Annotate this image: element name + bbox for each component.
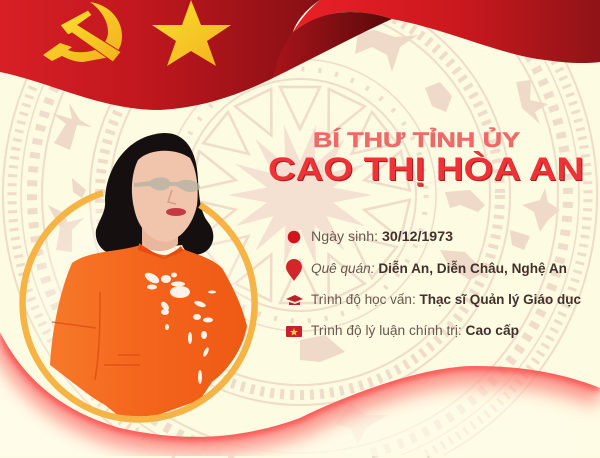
motif: animal upper right	[425, 82, 452, 112]
portrait group	[23, 133, 255, 425]
hammer	[60, 10, 121, 62]
glasses	[134, 177, 200, 192]
portrait ring inner glow	[28, 193, 252, 417]
icon: red dot	[288, 231, 300, 243]
nose	[168, 190, 176, 204]
dress sleeve shadow	[52, 292, 140, 380]
motif: bird right	[522, 188, 560, 232]
heading: name: CAO THỊ HÒA AN	[268, 151, 584, 187]
floral embroidery	[143, 271, 216, 384]
background: drum animal motifs	[48, 30, 560, 445]
heading: role: BÍ THƯ TỈNH ỦY	[313, 128, 520, 152]
top red banner	[0, 0, 600, 110]
portrait gold ring	[23, 193, 255, 419]
icon: flag star	[290, 328, 298, 336]
lips	[166, 208, 186, 216]
text: date of birth: Ngày sinh: 30/12/1973	[311, 229, 454, 244]
drum centre star	[228, 122, 372, 268]
motif: small bird left	[72, 178, 86, 198]
info list	[286, 229, 581, 338]
icon: gold star	[152, 0, 231, 66]
motif: bird bottom	[335, 402, 388, 445]
text: hometown: Quê quán: Diễn An, Diễn Châu, Nghệ An	[311, 261, 567, 276]
hair	[96, 133, 213, 257]
icon: flag background	[286, 326, 302, 337]
motif: deer top	[355, 30, 418, 72]
swoosh soft glow	[0, 338, 600, 441]
motif: deer lower centre	[300, 335, 345, 362]
motif: animal small lower right	[510, 230, 530, 250]
collar	[138, 243, 184, 259]
icon: hammer and sickle	[43, 2, 122, 62]
banner: dark fold	[273, 12, 392, 78]
motif: animal lower right	[440, 250, 485, 280]
icon: map pin	[286, 259, 302, 281]
face	[132, 151, 198, 242]
item: education	[286, 292, 581, 307]
text: education: Trình độ học vấn: Thạc sĩ Quản lý Giáo dục	[311, 292, 581, 307]
neck	[142, 228, 178, 251]
person	[50, 133, 247, 425]
bottom red swoosh	[0, 332, 600, 441]
heading: name shadow: CAO THỊ HÒA AN	[269, 152, 585, 188]
item: date of birth	[288, 229, 454, 244]
motif: animal right	[445, 190, 485, 212]
item: hometown	[286, 259, 567, 281]
motif: bird lower left	[48, 205, 84, 252]
banner: left wave	[0, 0, 320, 110]
motif: bird upper left	[52, 103, 92, 150]
icon: graduation cap	[286, 295, 303, 305]
sickle blade	[43, 2, 122, 62]
drum triangle ring	[190, 87, 410, 303]
item: political theory	[286, 323, 519, 338]
motif: bird top right	[516, 80, 548, 124]
title	[268, 128, 585, 188]
dress	[50, 245, 247, 425]
swoosh bright edge	[0, 332, 600, 437]
banner: right ribbon	[293, 0, 600, 63]
text: political theory: Trình độ lý luận chính trị: Cao cấp	[311, 323, 519, 338]
background: cream fade under the swoosh	[0, 332, 600, 456]
